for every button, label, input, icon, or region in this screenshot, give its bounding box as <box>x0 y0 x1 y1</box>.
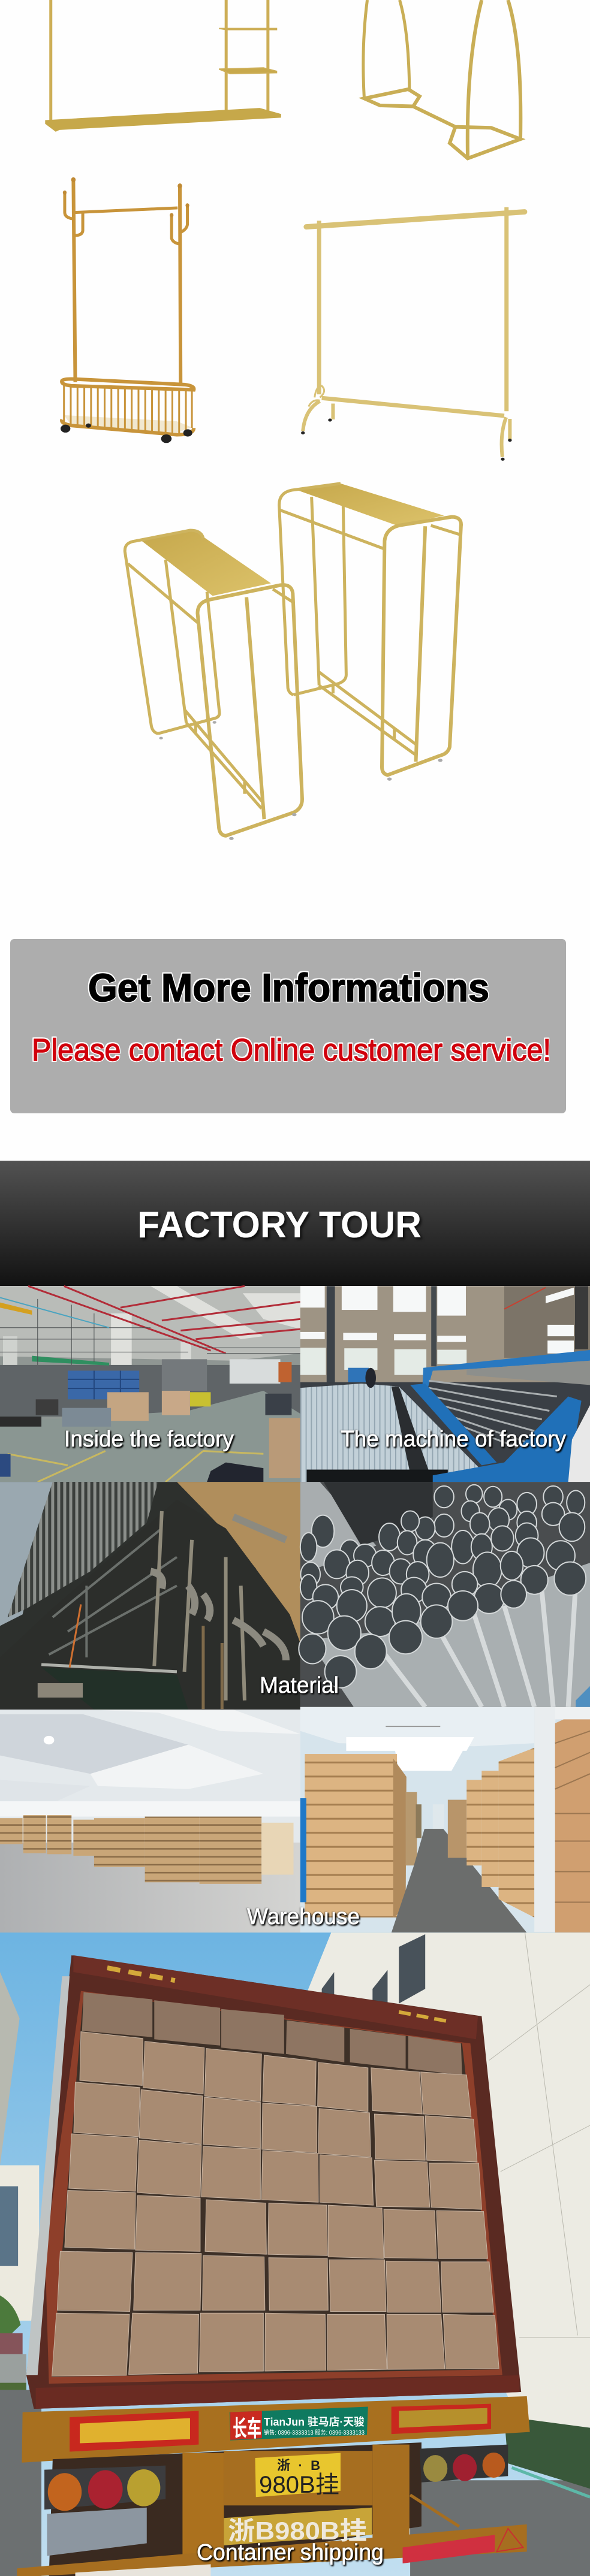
callout contact line: Please contact Online customer service! <box>32 1033 551 1068</box>
trailer sign text <box>233 2415 365 2442</box>
product rack images <box>45 0 525 840</box>
trailer sign text: 长车 <box>233 2417 261 2442</box>
rack: basket coat stand on wheels <box>61 177 194 443</box>
callout: get more informations <box>10 939 566 1113</box>
callout heading: Get More Informations <box>88 965 489 1010</box>
caption: material: Material <box>260 1673 339 1698</box>
rack: arched pentagon stand <box>363 0 520 159</box>
factory tour banner <box>0 1161 590 1286</box>
photo: warehouse hall <box>0 1710 300 1933</box>
banner background <box>0 1161 590 1286</box>
photo: material racks <box>0 1482 300 1710</box>
caption: the machine of factory: The machine of factory <box>341 1427 566 1452</box>
loaded container on truck scene <box>0 1932 590 2576</box>
photo: inside the factory <box>0 1286 300 1482</box>
painted plate number: 浙B980B挂 <box>228 2517 367 2545</box>
cargo cartons: top row <box>82 1992 462 2075</box>
steel tube bundle <box>299 1482 590 1707</box>
photo: container shipping <box>0 1932 590 2576</box>
photo: material tubes <box>299 1482 590 1707</box>
caption: container shipping: Container shipping <box>197 2540 384 2565</box>
trailer rear bar <box>22 2396 530 2463</box>
cargo cartons: wrapped rows <box>52 2032 499 2376</box>
photo: the machine of factory <box>300 1286 590 1482</box>
factory scene <box>0 1286 300 1482</box>
photo: warehouse aisle <box>300 1707 590 1933</box>
trailer sign text: 销售: 0396-3333313 服务: 0396-3333133 <box>264 2429 365 2436</box>
caption: inside the factory: Inside the factory <box>64 1427 234 1452</box>
license plate: 浙·B <box>277 2458 320 2473</box>
callout panel <box>10 939 566 1113</box>
rack: pair of nesting display tables <box>125 484 461 840</box>
trailer chassis <box>49 2442 422 2576</box>
banner heading: FACTORY TOUR <box>137 1204 422 1246</box>
caption: warehouse: Warehouse <box>247 1904 360 1929</box>
stacked frames scene <box>0 1482 300 1710</box>
warehouse aisle scene <box>300 1707 590 1933</box>
machine scene <box>300 1286 590 1482</box>
rack: wall shelf unit <box>45 0 281 132</box>
license plate: 980B挂 <box>259 2472 339 2498</box>
license plate <box>259 2458 339 2498</box>
trailer sign text: TianJun 驻马店·天骏 <box>264 2415 365 2428</box>
warehouse pallets scene <box>0 1710 300 1933</box>
rack: rolling garment rail <box>301 207 525 461</box>
